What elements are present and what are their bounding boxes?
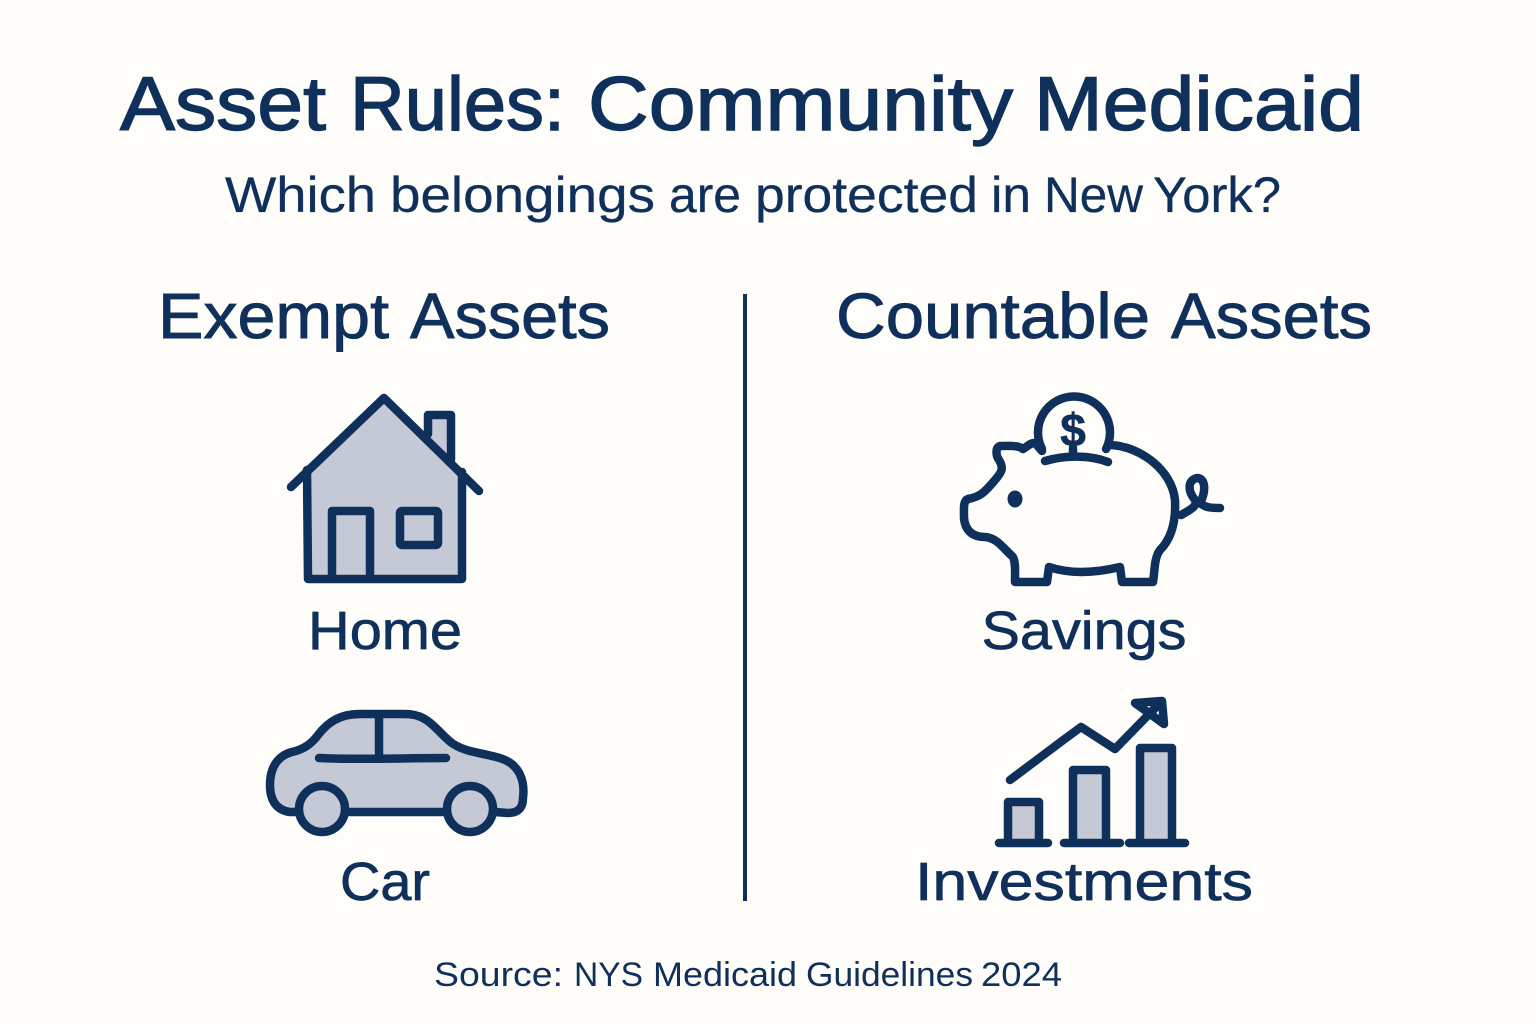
source — [434, 956, 1062, 994]
heading: exempt assets — [158, 280, 610, 352]
subtitle: in — [991, 167, 1031, 223]
icon: home — [291, 398, 479, 579]
title: Community — [588, 62, 1013, 147]
heading: countable assets: Assets — [1171, 280, 1372, 352]
title: Asset — [120, 62, 326, 147]
label: investments: Investments — [915, 852, 1253, 912]
subtitle: are — [669, 167, 741, 223]
center divider — [743, 294, 747, 901]
label: car: Car — [340, 852, 430, 912]
source: Guidelines — [806, 956, 973, 994]
label: savings: Savings — [982, 601, 1186, 661]
title: Rules: — [350, 62, 565, 147]
source: 2024 — [981, 956, 1062, 994]
icon: investments chart — [999, 701, 1185, 843]
subtitle: New — [1044, 167, 1144, 223]
title: Medicaid — [1034, 62, 1364, 147]
source: Medicaid — [653, 956, 797, 994]
subtitle: belongings — [390, 167, 655, 223]
label: home: Home — [308, 601, 462, 661]
icon: piggy bank — [964, 397, 1220, 582]
icon: piggy bank: $ — [1060, 404, 1086, 456]
source: NYS — [574, 956, 643, 994]
subtitle: Which — [225, 167, 376, 223]
heading: exempt assets: Assets — [410, 280, 610, 352]
subtitle: protected — [755, 167, 978, 223]
heading: exempt assets: Exempt — [158, 280, 389, 352]
subtitle: York? — [1153, 167, 1281, 223]
icon: car — [270, 714, 523, 832]
heading: countable assets: Countable — [836, 280, 1150, 352]
subtitle — [225, 167, 1281, 223]
title — [120, 62, 1364, 147]
source: Source: — [434, 956, 563, 994]
heading: countable assets — [836, 280, 1372, 352]
